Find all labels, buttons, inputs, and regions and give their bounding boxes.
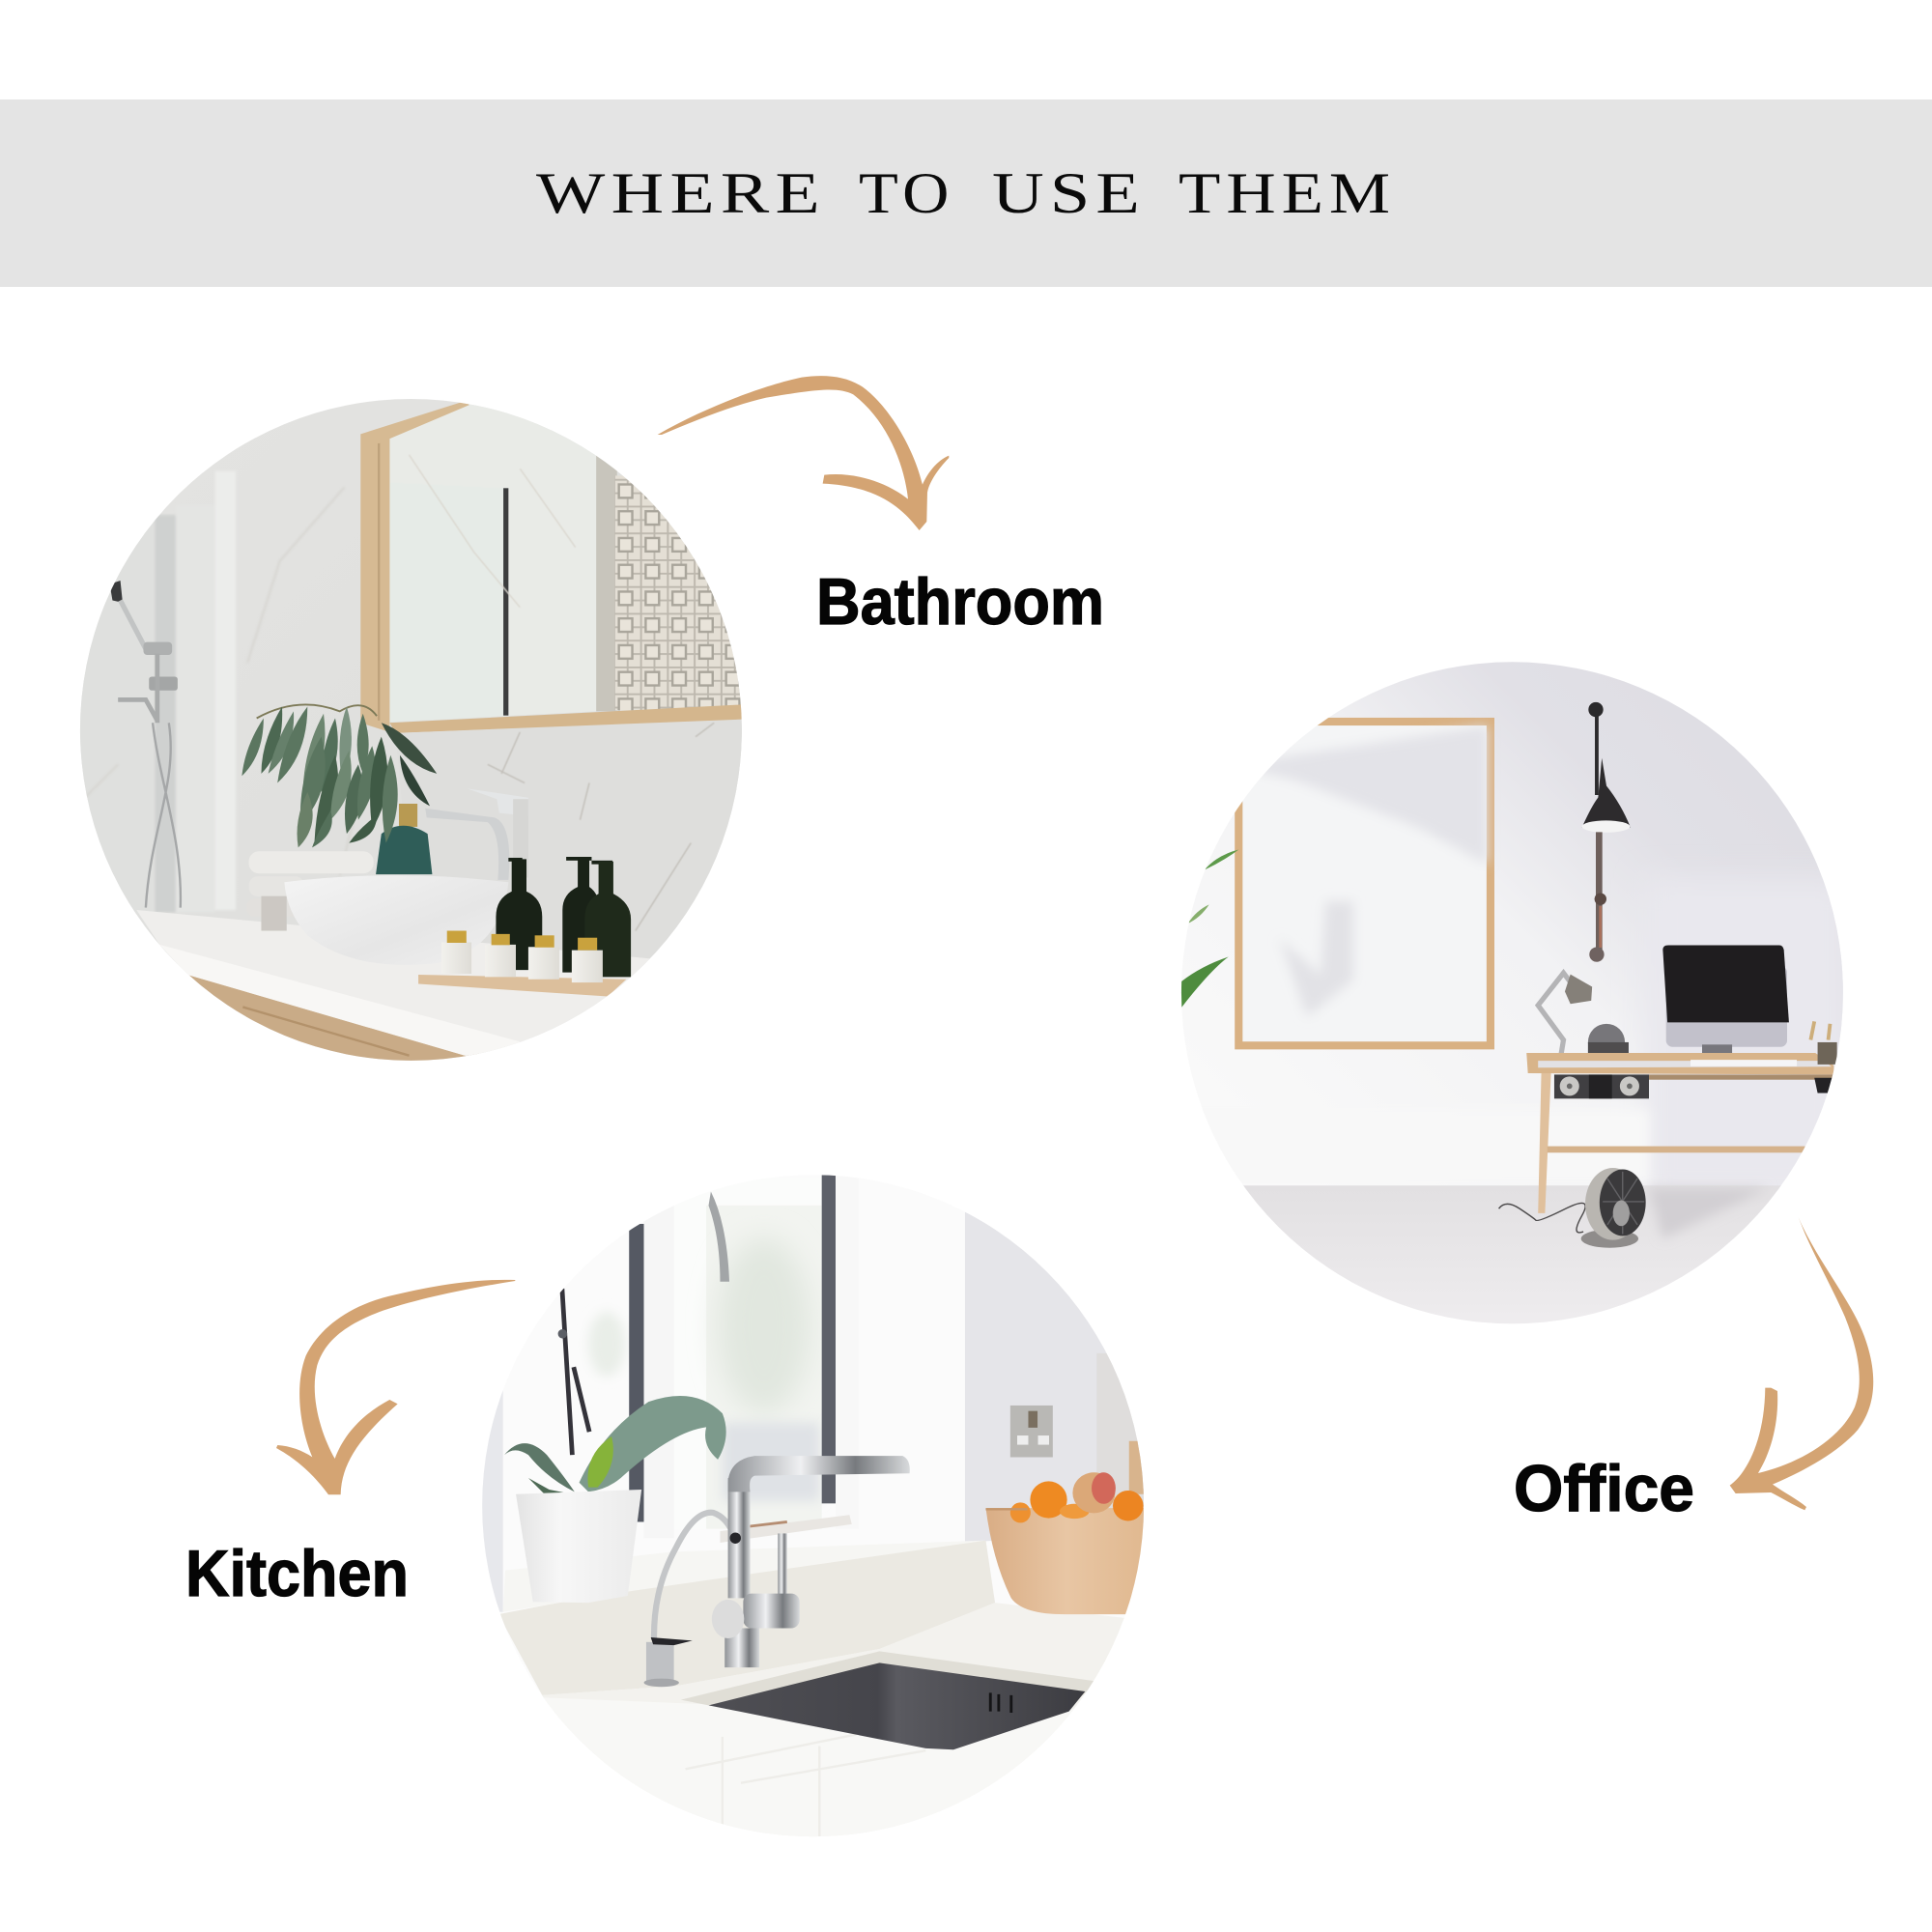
- fan: [1499, 1168, 1646, 1248]
- vase: [376, 804, 432, 874]
- mirror: [360, 395, 747, 732]
- worktop: [477, 1603, 1152, 1843]
- lower wall: [400, 724, 742, 952]
- faucet: [425, 788, 528, 880]
- wall socket: [1010, 1406, 1053, 1458]
- poster frame: [1238, 722, 1491, 1045]
- label: Office: Office: [1514, 1452, 1694, 1525]
- worktop upstand: [498, 1541, 995, 1695]
- towels: [246, 851, 374, 931]
- title: WHERE: [536, 161, 826, 225]
- mixer tap: [724, 1456, 910, 1667]
- photo: bathroom: [76, 395, 747, 1065]
- arrow: to office: [1730, 1217, 1873, 1510]
- amenity tray: [418, 931, 626, 996]
- arrow: to kitchen: [276, 1280, 515, 1494]
- cabinet: [189, 976, 479, 1061]
- plant leaves: [1180, 849, 1238, 1008]
- floor: [1243, 1185, 1781, 1323]
- title: USE: [992, 161, 1146, 225]
- plant: [242, 704, 437, 847]
- wall lamp: [1582, 702, 1631, 962]
- desk clock: [1588, 1024, 1629, 1053]
- desk lamp: [1538, 973, 1592, 1065]
- vessel sink: [284, 875, 508, 965]
- title: THEM: [1179, 161, 1396, 225]
- label: Kitchen: Kitchen: [185, 1537, 409, 1610]
- window: [588, 1173, 965, 1543]
- monitor: [1662, 946, 1789, 1058]
- arrow: to bathroom: [658, 376, 949, 530]
- header band: [0, 99, 1932, 287]
- shower fittings: [110, 581, 181, 908]
- filter tap: [644, 1513, 734, 1687]
- title: TO: [859, 161, 954, 225]
- countertop: [137, 910, 649, 1056]
- fruit bowl: [985, 1441, 1148, 1614]
- title: [536, 161, 1396, 225]
- grey wall: [965, 1206, 1152, 1543]
- speaker: [1554, 1074, 1649, 1098]
- desk: [1526, 1021, 1837, 1213]
- white pot: [516, 1490, 641, 1603]
- orchid: [504, 1289, 726, 1494]
- sink: [681, 1651, 1096, 1749]
- soap bottles: [496, 857, 631, 977]
- label: Bathroom: Bathroom: [816, 565, 1104, 639]
- photo: office: [1178, 659, 1848, 1331]
- photo: kitchen: [477, 1171, 1152, 1843]
